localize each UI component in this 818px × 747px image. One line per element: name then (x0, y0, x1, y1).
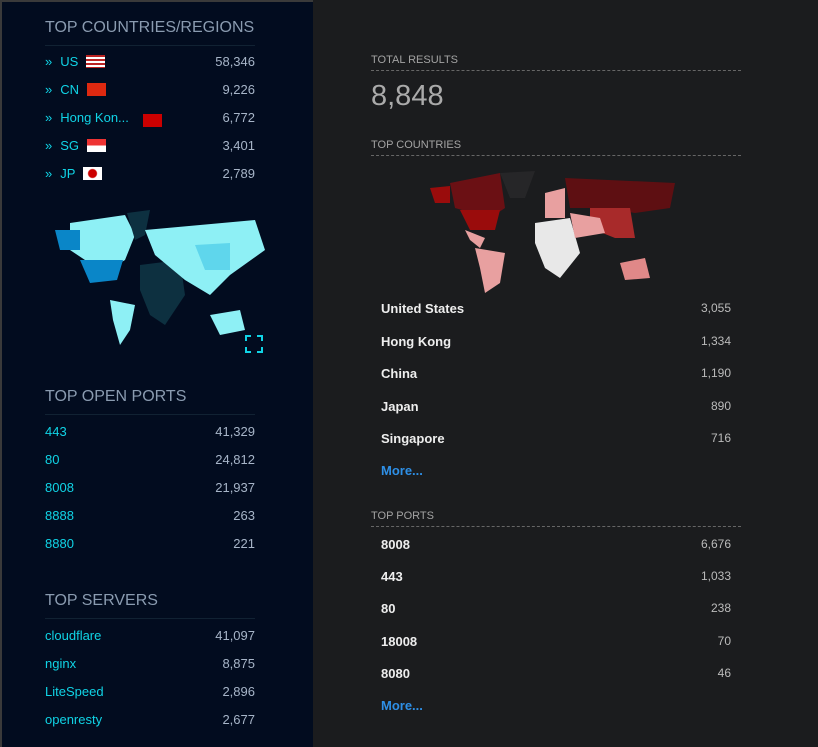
text: 8080 (381, 666, 410, 681)
list: ports right: 6,676 (701, 537, 731, 551)
text: 2,896 (222, 684, 255, 699)
link: more countries: More... (381, 463, 423, 478)
text: Hong Kong (381, 334, 451, 349)
text: 221 (233, 536, 255, 551)
heading: top open ports: TOP OPEN PORTS (45, 388, 186, 405)
heading: top servers: TOP SERVERS (45, 592, 158, 609)
text: 18008 (381, 634, 417, 649)
list: ports: 443 (45, 424, 67, 439)
icon: expand (245, 335, 263, 353)
row: HK: » Hong Kon... (45, 110, 129, 125)
text: 238 (711, 601, 731, 615)
text: China (381, 366, 417, 381)
number: total: 8,848 (371, 80, 444, 112)
list: countries: 3,055 (701, 301, 731, 315)
list: countries (381, 301, 731, 316)
text: 24,812 (215, 452, 255, 467)
text: LiteSpeed (45, 684, 104, 699)
row: JP: 2,789 (222, 166, 255, 181)
text: 21,937 (215, 480, 255, 495)
row: JP (45, 166, 255, 181)
text: Japan (381, 399, 419, 414)
list: servers: cloudflare (45, 628, 101, 643)
row: HK: 6,772 (222, 110, 255, 125)
text: 1,033 (701, 569, 731, 583)
heading: top countries (371, 139, 741, 156)
text: 80 (45, 452, 59, 467)
row: CN: » CN (45, 82, 79, 97)
link: more ports: More... (381, 698, 423, 713)
list: ports right (381, 537, 731, 552)
heading: top open ports (45, 388, 255, 415)
text: nginx (45, 656, 76, 671)
text: 8888 (45, 508, 74, 523)
chart: left world map (55, 210, 265, 345)
text: 443 (381, 569, 403, 584)
heading: total results: TOTAL RESULTS (371, 54, 458, 66)
text: 263 (233, 508, 255, 523)
text: 8,875 (222, 656, 255, 671)
text: 46 (718, 666, 731, 680)
row: JP: » JP (45, 166, 75, 181)
text: 80 (381, 601, 395, 616)
text: 1,334 (701, 334, 731, 348)
list: countries: United States (381, 301, 464, 316)
text: 890 (711, 399, 731, 413)
heading: top ports: TOP PORTS (371, 510, 434, 522)
text: 2,677 (222, 712, 255, 727)
chart: right world map (430, 171, 675, 293)
text: 70 (718, 634, 731, 648)
list: ports (45, 424, 255, 439)
row: SG: » SG (45, 138, 79, 153)
text: openresty (45, 712, 102, 727)
row: SG (45, 138, 255, 153)
heading: top ports (371, 510, 741, 527)
heading: top servers (45, 592, 255, 619)
list: ports: 41,329 (215, 424, 255, 439)
panel: left sidebar (0, 0, 313, 747)
row: CN: 9,226 (222, 82, 255, 97)
heading: top countries/regions: TOP COUNTRIES/REGIONS (45, 19, 254, 36)
row: US (45, 54, 255, 69)
list: servers: 41,097 (215, 628, 255, 643)
text: 8008 (45, 480, 74, 495)
list: servers (45, 628, 255, 643)
row: SG: 3,401 (222, 138, 255, 153)
text: 716 (711, 431, 731, 445)
row: US: » US (45, 54, 78, 69)
text: Singapore (381, 431, 445, 446)
row: HK (45, 110, 255, 127)
heading: top countries/regions (45, 19, 255, 46)
list: ports right: 8008 (381, 537, 410, 552)
text: 1,190 (701, 366, 731, 380)
heading: top countries: TOP COUNTRIES (371, 139, 461, 151)
heading: total results (371, 54, 741, 71)
text: 8880 (45, 536, 74, 551)
row: CN (45, 82, 255, 97)
row: US: 58,346 (215, 54, 255, 69)
